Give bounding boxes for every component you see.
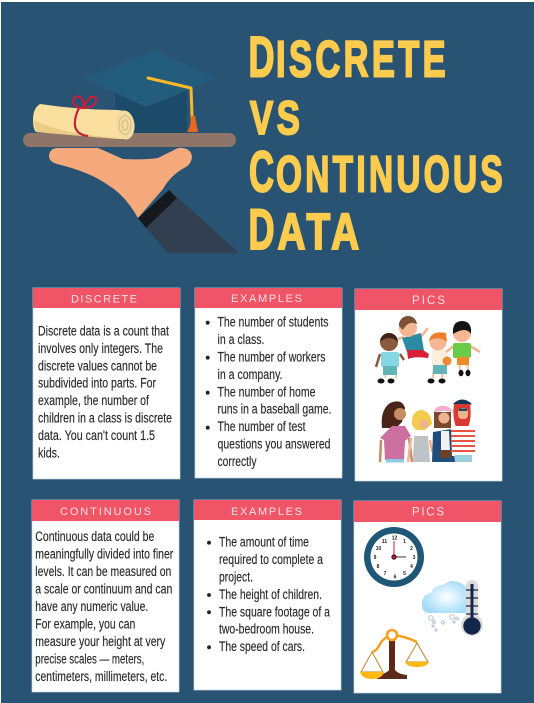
icon: cloud with snow [422, 581, 467, 631]
list: continuous examples: The speed of cars. [219, 639, 305, 654]
header: pics: PICS [412, 507, 444, 519]
text block: continuous definition [35, 529, 174, 684]
icon: group of children [376, 316, 480, 384]
icon: clock: 11 [382, 539, 387, 545]
panel: continuous pics [354, 501, 501, 693]
title: C [249, 141, 274, 205]
icon: clock [364, 527, 424, 587]
list: discrete examples: The number of students [218, 315, 329, 330]
icon: clock: 2 [410, 546, 413, 552]
title: ATA [278, 203, 363, 260]
list: continuous examples: required to complete a [219, 552, 323, 567]
list: discrete examples: The number of home [218, 384, 316, 399]
panel: continuous [32, 500, 179, 692]
header: examples: EXAMPLES [231, 293, 302, 305]
icon: clock: 8 [377, 564, 380, 570]
text block: continuous definition: measure your height at very [35, 634, 165, 649]
header: pics [354, 501, 501, 522]
header: pics: PICS [412, 295, 445, 307]
icon: diploma scroll [33, 104, 136, 140]
list: continuous examples [207, 535, 330, 654]
text block: discrete definition: involves only integers. The [38, 341, 163, 356]
panel: discrete pics [355, 289, 502, 481]
panel: continuous examples [194, 500, 341, 690]
header: discrete [33, 288, 180, 308]
text block: discrete definition [38, 324, 172, 460]
text block: continuous definition: a scale or continuum and can [35, 581, 172, 596]
text block: continuous definition: have any numeric value. [35, 599, 148, 614]
list: continuous examples: The height of children. [219, 587, 322, 602]
header: continuous: CONTINUOUS [60, 506, 151, 518]
icon: balance scales [360, 630, 429, 679]
icon: hand [49, 148, 192, 218]
icon: graduation cap board [84, 50, 216, 107]
icon: red ribbon [73, 96, 96, 136]
icon: clock: 7 [384, 571, 387, 577]
text block: discrete definition: Discrete data is a count that [38, 324, 169, 338]
text block: discrete definition: subdivided into parts. For [38, 376, 156, 391]
text block: discrete definition: data. You can't count 1.5 [38, 428, 155, 443]
header: examples [195, 288, 342, 308]
list: discrete examples: runs in a baseball game. [218, 402, 332, 417]
icon: group of women [380, 400, 475, 462]
icon: clock: 9 [374, 555, 377, 561]
text block: continuous definition: Continuous data could be [35, 529, 154, 544]
list: discrete examples [206, 315, 332, 469]
icon: woman two [408, 410, 432, 462]
title: D [248, 25, 274, 89]
icon: child three [428, 332, 452, 384]
icon: clock: 3 [413, 555, 416, 561]
text block: discrete definition: kids. [38, 445, 60, 460]
text block: discrete definition: children in a class is discrete [38, 411, 172, 426]
panel: discrete examples [195, 288, 342, 478]
icon: thermometer [461, 580, 483, 636]
icon: child four [446, 321, 480, 376]
title: D [248, 198, 274, 262]
icon: clock: 1 [403, 539, 406, 545]
icon: clock: 6 [394, 574, 397, 580]
text block: continuous definition: precise scales — meters, [35, 651, 144, 666]
icon: clock: 10 [376, 546, 381, 552]
icon: clock: 5 [403, 571, 406, 577]
header: continuous [32, 500, 179, 521]
illustration: hand holding tray with diploma and graduation cap [23, 50, 239, 253]
header: examples [194, 500, 341, 520]
icon: child two [398, 316, 429, 359]
icon: graduation cap base [115, 91, 187, 133]
icon: woman four [451, 400, 475, 462]
header: discrete: DISCRETE [71, 294, 137, 306]
list: discrete examples: in a class. [218, 332, 264, 347]
text block: continuous definition: levels. It can be measured on [35, 564, 171, 579]
list: discrete examples: The number of test [218, 419, 306, 434]
header: pics [355, 289, 502, 310]
list: discrete examples: in a company. [218, 367, 282, 382]
list: continuous examples: The square footage of a [219, 604, 330, 619]
icon: tassel [148, 78, 198, 132]
icon: cuff [138, 190, 177, 228]
text block: discrete definition: example, the number of [38, 393, 149, 408]
icon: woman three [432, 406, 455, 462]
title: ISCRETE [276, 30, 449, 87]
icon: woman one [380, 401, 412, 462]
icon: sleeve [146, 197, 239, 253]
title: VS [250, 92, 304, 145]
text block: continuous definition: centimeters, millimeters, etc. [35, 669, 167, 684]
icon: clock: 12 [392, 536, 397, 542]
text block: continuous definition: meaningfully divided into finer [35, 547, 174, 562]
list: continuous examples: project. [219, 570, 253, 585]
panel: discrete [33, 288, 180, 479]
icon: clock: 4 [410, 564, 413, 570]
header: examples: EXAMPLES [231, 506, 302, 518]
icon: child one [376, 333, 404, 384]
list: discrete examples: questions you answered [218, 436, 330, 451]
text block: continuous definition: For example, you can [35, 616, 135, 631]
list: discrete examples: correctly [218, 454, 257, 469]
text block: discrete definition: discrete values cannot be [38, 358, 157, 373]
list: continuous examples: The amount of time [219, 535, 309, 550]
title [248, 25, 506, 262]
icon: tray [23, 133, 236, 147]
list: discrete examples: The number of workers [218, 349, 326, 364]
list: continuous examples: two-bedroom house. [219, 622, 314, 637]
